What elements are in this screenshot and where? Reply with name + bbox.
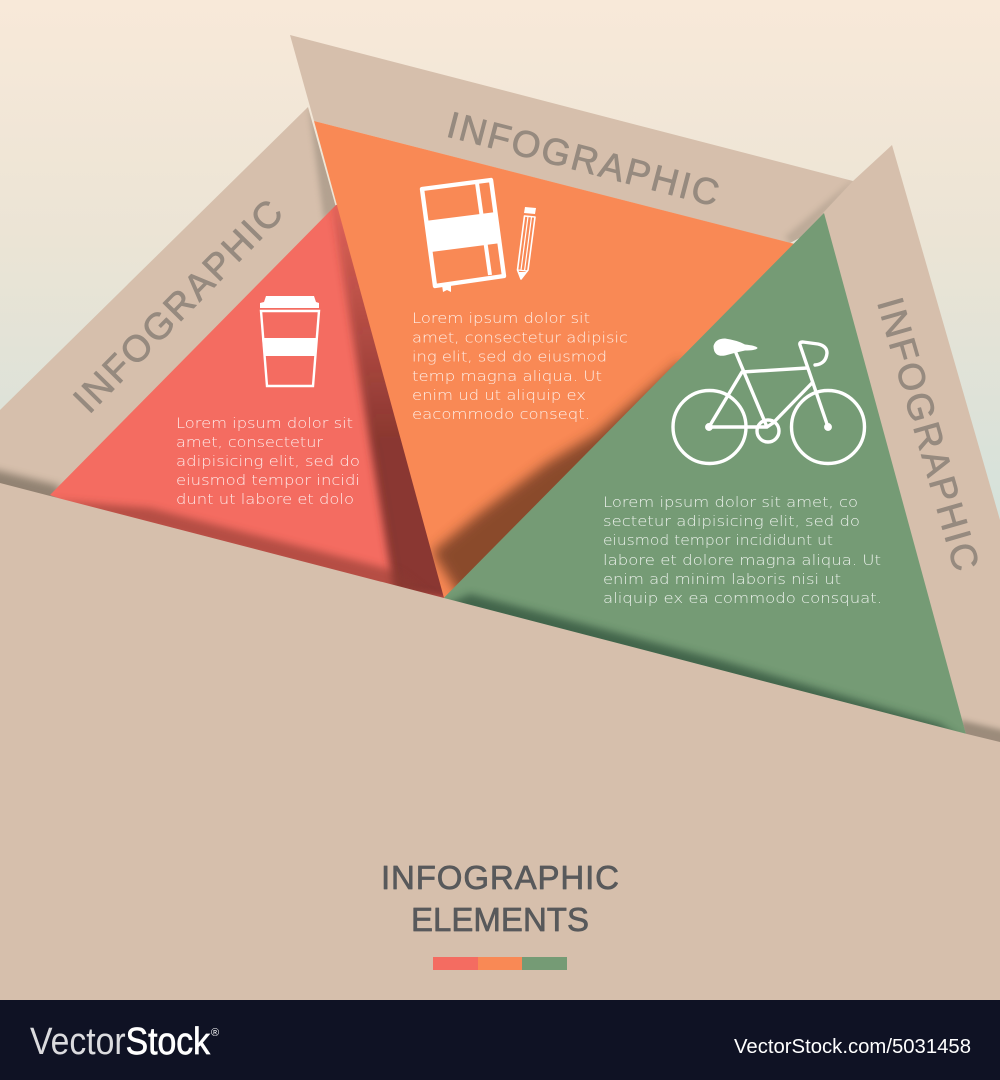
logo: registered mark: ® — [211, 1027, 219, 1039]
band label: right: INFOGRAPHIC — [869, 293, 987, 575]
panel: right tan band — [823, 145, 1000, 760]
text: orange panel: enim ud ut aliquip ex — [412, 388, 586, 404]
text: green panel: Lorem ipsum dolor sit amet, co — [603, 495, 858, 511]
footer bar — [0, 1000, 1000, 1080]
text: green panel: sectetur adipisicing elit, sed do — [603, 514, 860, 530]
text: orange panel: amet, consectetur adipisic — [412, 330, 628, 346]
title: INFOGRAPHIC — [381, 859, 619, 896]
panel: bottom tan sheet — [0, 483, 1000, 1001]
panel: orange triangle — [314, 121, 794, 598]
title: ELEMENTS — [411, 901, 589, 938]
text: orange panel — [412, 311, 628, 423]
background — [0, 0, 1000, 540]
panel: top tan band — [290, 35, 870, 248]
icon: bicycle — [673, 339, 864, 464]
title — [381, 859, 619, 938]
icon: pencil — [518, 207, 536, 279]
text: coral panel — [176, 416, 360, 508]
footer: image id: VectorStock.com/5031458 — [734, 1036, 971, 1058]
text: coral panel: adipisicing elit, sed do — [176, 454, 360, 470]
panel: left tan band — [0, 100, 346, 520]
text: orange panel: Lorem ipsum dolor sit — [412, 311, 590, 327]
text: green panel: labore et dolore magna aliqua. Ut — [603, 553, 881, 569]
logo: VectorStock: VectorStock — [30, 1021, 211, 1063]
band label: left: INFOGRAPHIC — [65, 192, 291, 421]
panel: coral triangle — [50, 204, 444, 598]
text: green panel — [603, 495, 882, 607]
text: green panel: aliquip ex ea commodo consquat. — [603, 591, 882, 607]
text: orange panel: ing elit, sed do eiusmod — [412, 350, 607, 366]
text: coral panel: dunt ut labore et dolo — [176, 492, 354, 508]
text: green panel: enim ad minim laboris nisi ut — [603, 572, 841, 588]
colour bar — [433, 957, 567, 970]
icon: coffee cup — [260, 296, 319, 386]
text: green panel: eiusmod tempor incididunt ut — [603, 533, 833, 549]
panel: green triangle — [422, 213, 973, 760]
text: coral panel: amet, consectetur — [176, 435, 323, 451]
icon: notebook — [422, 180, 504, 292]
text: orange panel: temp magna aliqua. Ut — [412, 369, 602, 385]
text: coral panel: Lorem ipsum dolor sit — [176, 416, 353, 432]
band label: top: INFOGRAPHIC — [443, 104, 723, 214]
text: coral panel: eiusmod tempor incidi — [176, 473, 360, 489]
text: orange panel: eacommodo conseqt. — [412, 407, 590, 423]
